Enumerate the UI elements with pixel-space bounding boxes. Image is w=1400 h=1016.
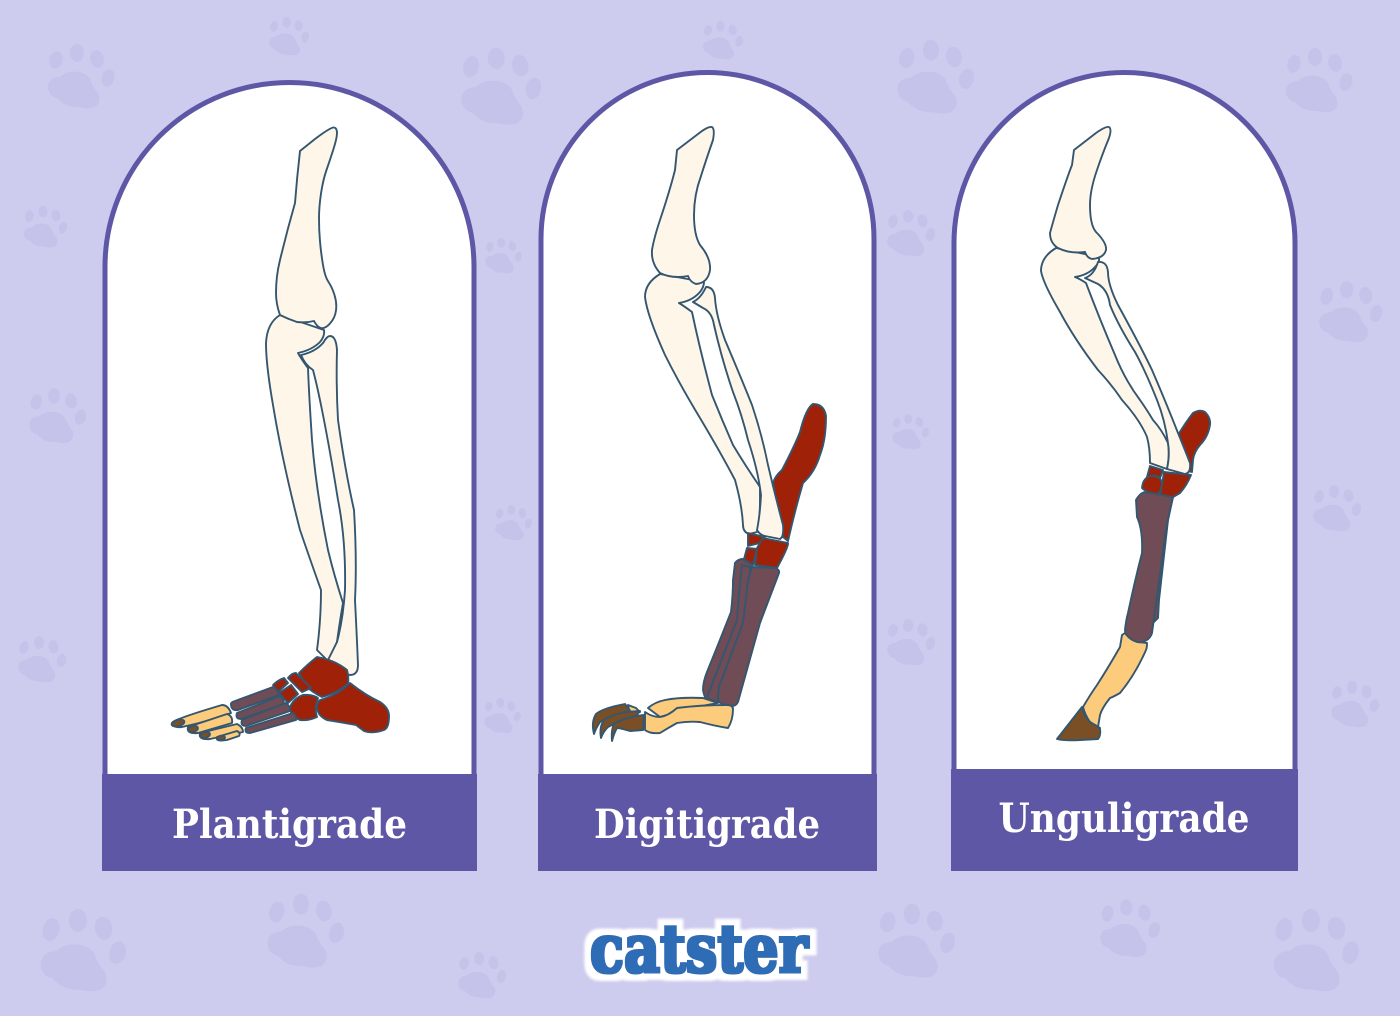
panel: unguligrade — [951, 72, 1298, 871]
label band — [538, 774, 877, 871]
panel: digitigrade — [538, 72, 877, 871]
panel: plantigrade — [102, 83, 477, 871]
heading: Plantigrade: Plantigrade — [172, 801, 407, 848]
leg bones: plantigrade — [171, 127, 389, 741]
label band — [951, 769, 1298, 871]
arch frame — [954, 72, 1295, 790]
arch frame — [105, 83, 474, 790]
heading: Unguligrade: Unguligrade — [998, 795, 1250, 842]
logo: catster: catster — [590, 910, 809, 988]
label band — [102, 774, 477, 871]
heading: Digitigrade: Digitigrade — [594, 801, 820, 848]
arch frame — [541, 72, 874, 790]
leg bones: unguligrade — [1041, 127, 1210, 740]
leg bones: digitigrade — [593, 127, 826, 741]
